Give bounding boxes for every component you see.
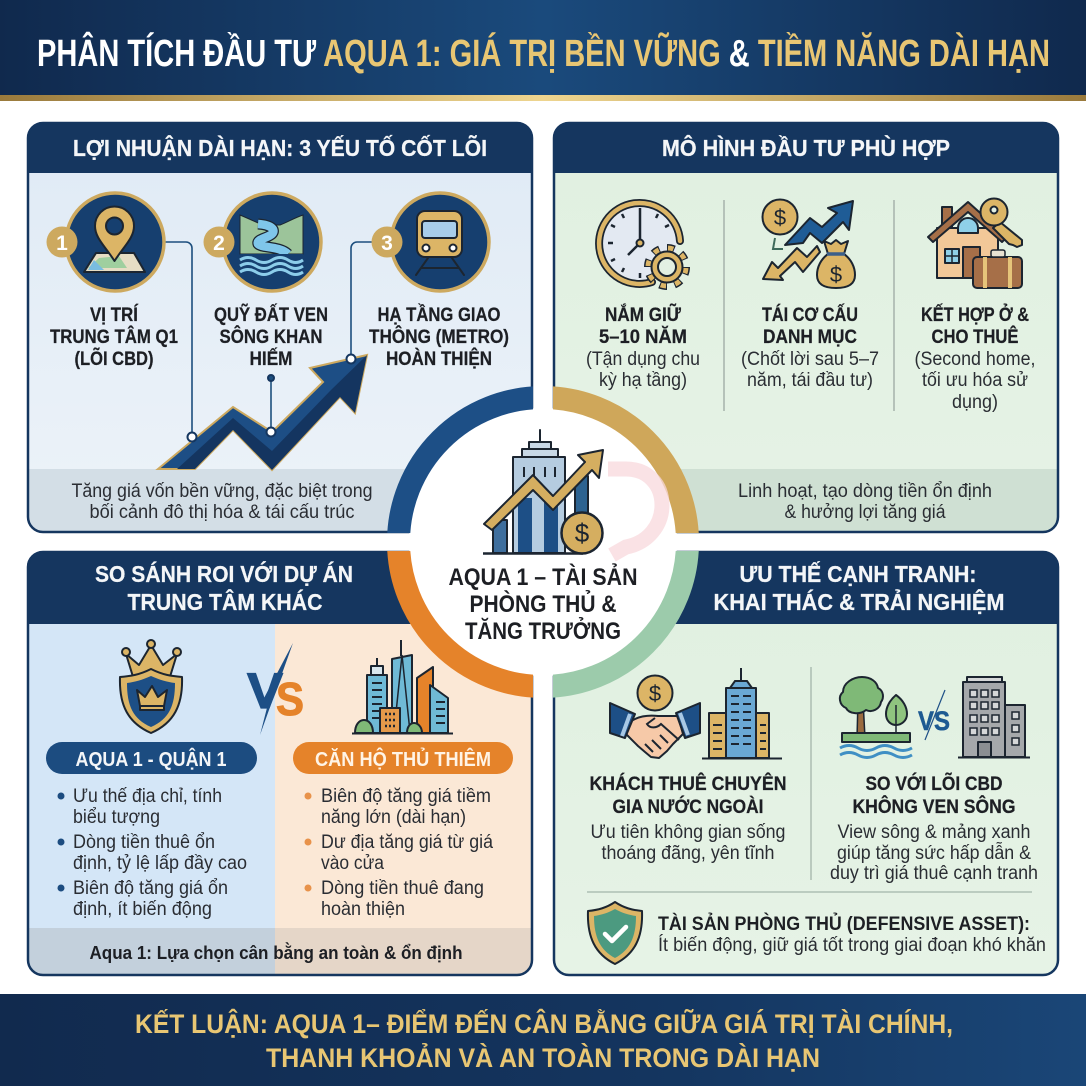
label: land fund: QUỸ ĐẤT VEN (214, 303, 328, 326)
column: live and rent: KẾT HỢP Ở & (921, 302, 1029, 326)
label: land fund (214, 303, 328, 370)
list: Thu Thiem advantages: vào cửa (321, 853, 384, 874)
icon: check shield (588, 902, 642, 964)
column: restructure (741, 303, 879, 391)
takeaway (738, 481, 992, 523)
takeaway (72, 481, 372, 523)
pill: Aqua 1 (46, 742, 257, 774)
icon: tower, growth arrow and coin: $ (575, 518, 590, 548)
block: compared to CBD core: giúp tăng sức hấp dẫn & (837, 842, 1031, 864)
ring: gold (553, 386, 699, 533)
icon: small VS: VS (918, 706, 950, 736)
list: Thu Thiem advantages: năng lớn (dài hạn) (321, 807, 466, 828)
icon: VS: V (247, 663, 284, 719)
list: Thu Thiem advantages: hoàn thiện (321, 899, 405, 920)
label: location (50, 303, 178, 370)
heading: TRUNG TÂM KHÁC (128, 588, 322, 615)
list: Aqua 1 advantages: Biên độ tăng giá ổn (73, 878, 228, 899)
defensive asset note (658, 911, 1046, 956)
column: live and rent (914, 302, 1036, 413)
conclusion banner: KẾT LUẬN: AQUA 1– ĐIỂM ĐẾN CÂN BẰNG GIỮA GIÁ TRỊ TÀI CHÍNH, (135, 1008, 953, 1039)
column: live and rent: dụng) (952, 392, 998, 413)
badge 2 (204, 226, 234, 258)
pill: Aqua 1: AQUA 1 - QUẬN 1 (76, 747, 226, 771)
connector dots (188, 354, 356, 442)
block: compared to CBD core: KHÔNG VEN SÔNG (852, 794, 1016, 818)
column: hold: (Tận dụng chu (586, 349, 700, 370)
hub label: PHÒNG THỦ & (470, 589, 616, 618)
label: land fund: SÔNG KHAN (220, 324, 322, 348)
panel: investment models (553, 122, 1059, 533)
conclusion banner (0, 994, 1086, 1086)
block: foreign expert tenants: GIA NƯỚC NGOÀI (612, 794, 764, 818)
icon: crown shield (120, 640, 182, 733)
pill: Thu Thiem: CĂN HỘ THỦ THIÊM (315, 747, 491, 771)
column: restructure: năm, tái đầu tư) (747, 370, 873, 391)
badge 3 (372, 226, 402, 258)
takeaway: Linh hoạt, tạo dòng tiền ổn định (738, 481, 992, 502)
block: compared to CBD core (830, 771, 1038, 884)
hub label: TĂNG TRƯỞNG (465, 616, 621, 645)
column: hold: kỳ hạ tầng) (599, 370, 687, 391)
icon: portfolio restructuring (762, 200, 855, 288)
list: Aqua 1 advantages (58, 786, 247, 920)
list: Aqua 1 advantages: Ưu thế địa chỉ, tính (73, 786, 222, 807)
column: hold: NẮM GIỮ (605, 302, 682, 326)
column: restructure: TÁI CƠ CẤU (762, 303, 858, 326)
growth arrow (158, 355, 367, 470)
block: foreign expert tenants: thoáng đãng, yên tĩnh (602, 843, 774, 864)
list: Aqua 1 advantages: định, tỷ lệ lấp đầy cao (73, 853, 247, 874)
takeaway: bối cảnh đô thị hóa & tái cấu trúc (90, 502, 354, 523)
panel: long-term returns (27, 122, 533, 533)
icon: clock and gear (599, 203, 686, 286)
icon: VS (247, 643, 304, 735)
label: infrastructure (369, 303, 509, 370)
icon: VS: S (276, 673, 304, 725)
label: infrastructure: HOÀN THIỆN (386, 346, 492, 370)
icon: handshake, coin and tower (610, 668, 782, 758)
icon: riverside land (223, 193, 321, 291)
block: compared to CBD core: duy trì giá thuê cạnh tranh (830, 863, 1038, 884)
list: Thu Thiem advantages: Dòng tiền thuê đang (321, 878, 484, 899)
badge 1 (46, 226, 78, 258)
icon: riverside trees vs gray building (840, 677, 1030, 758)
column: live and rent: CHO THUÊ (932, 324, 1018, 348)
badge 3: 3 (381, 232, 393, 255)
icon: city skyline (352, 640, 453, 734)
block: foreign expert tenants: KHÁCH THUÊ CHUYÊN (590, 771, 786, 795)
heading (95, 560, 353, 615)
block: foreign expert tenants (590, 771, 786, 864)
icon: portfolio restructuring: $ (774, 205, 786, 230)
label: land fund: HIẾM (250, 347, 292, 370)
list: Aqua 1 advantages: biểu tượng (73, 807, 160, 828)
block: compared to CBD core: SO VỚI LÕI CBD (866, 771, 1002, 795)
defensive asset note: Ít biến động, giữ giá tốt trong giai đoạn khó khăn (658, 935, 1046, 956)
icon: location pin on map (66, 193, 164, 291)
heading: MÔ HÌNH ĐẦU TƯ PHÙ HỢP (662, 134, 950, 161)
pill: Thu Thiem (293, 742, 513, 774)
badge 1: 1 (56, 232, 68, 255)
heading: SO SÁNH ROI VỚI DỰ ÁN (95, 560, 353, 587)
column: hold: 5–10 NĂM (599, 325, 687, 348)
block: compared to CBD core: View sông & mảng xanh (838, 822, 1030, 843)
icon: house, key and suitcase (928, 198, 1022, 288)
column: restructure: (Chốt lời sau 5–7 (741, 349, 879, 370)
takeaway: & hưởng lợi tăng giá (784, 502, 946, 523)
label: location: TRUNG TÂM Q1 (50, 324, 178, 348)
ring: green (553, 551, 699, 698)
icon: metro train (391, 193, 489, 291)
column: live and rent: tối ưu hóa sử (922, 370, 1028, 391)
icon: small VS (918, 690, 950, 740)
panel: competitive advantage (553, 551, 1059, 976)
label: location: (LÕI CBD) (74, 346, 154, 370)
column: restructure: DANH MỤC (763, 326, 857, 348)
panel: comparison (27, 551, 533, 976)
icon: portfolio restructuring: $ (830, 262, 842, 287)
label: infrastructure: HẠ TẦNG GIAO (378, 303, 500, 326)
list: Thu Thiem advantages: Dư địa tăng giá từ giá (321, 832, 493, 853)
takeaway: Tăng giá vốn bền vững, đặc biệt trong (72, 481, 372, 502)
block: foreign expert tenants: Ưu tiên không gian sống (590, 822, 786, 843)
column: live and rent: (Second home, (914, 349, 1036, 370)
list: Thu Thiem advantages (304, 786, 493, 920)
defensive asset note: TÀI SẢN PHÒNG THỦ (DEFENSIVE ASSET): (658, 911, 1030, 935)
list: Aqua 1 advantages: định, ít biến động (73, 899, 212, 920)
list: Thu Thiem advantages: Biên độ tăng giá tiềm (321, 786, 491, 807)
ring: blue (387, 386, 533, 533)
heading: LỢI NHUẬN DÀI HẠN: 3 YẾU TỐ CỐT LÕI (73, 134, 487, 161)
watermark (608, 469, 662, 555)
heading (714, 560, 1004, 615)
title banner (0, 0, 1086, 101)
conclusion banner: THANH KHOẢN VÀ AN TOÀN TRONG DÀI HẠN (266, 1041, 820, 1073)
connector lines (165, 242, 375, 437)
icon: handshake, coin and tower: $ (649, 681, 661, 706)
label: location: VỊ TRÍ (90, 303, 138, 326)
takeaway: Aqua 1: Lựa chọn cân bằng an toàn & ổn định (90, 942, 462, 963)
column: hold (586, 302, 700, 391)
heading: ƯU THẾ CẠNH TRANH: (740, 560, 976, 587)
badge 2: 2 (213, 232, 225, 255)
list: Aqua 1 advantages: Dòng tiền thuê ổn (73, 832, 215, 853)
heading: KHAI THÁC & TRẢI NGHIỆM (714, 587, 1004, 615)
label: infrastructure: THÔNG (METRO) (369, 324, 509, 348)
icon: tower, growth arrow and coin (483, 430, 603, 554)
center hub (398, 398, 688, 686)
hub label (448, 562, 638, 645)
hub label: AQUA 1 – TÀI SẢN (448, 562, 638, 591)
ring: orange (387, 551, 533, 698)
